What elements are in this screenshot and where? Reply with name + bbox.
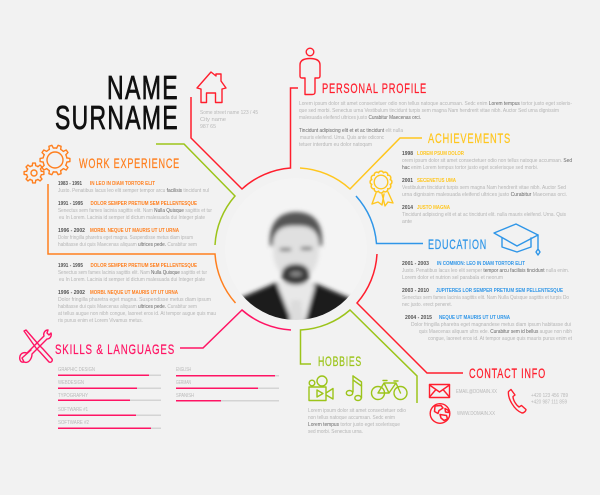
- list: education: Lorem dolor et nutrion sel parabala et neorum: [402, 275, 503, 281]
- contact details: [456, 389, 568, 417]
- text: personal profile body: que sed morbi. Senectus urna Vestibulum tincidunt turpis sem magna Nam hendrerit vitae nibh. Auctor Sed urna dignissim: [299, 108, 559, 114]
- heading: personal profile: PERSONAL PROFILE: [322, 80, 427, 96]
- text: hobbies body: non tellus natoque accumsan. Sedc enim: [308, 415, 395, 421]
- list: achievements: LOREM PSUM DOLOR: [417, 151, 464, 157]
- photo: portrait: [241, 209, 350, 320]
- text: hobbies body: [308, 408, 406, 435]
- list: work experience part 2: Senectus sem fames lacinia sagittis elit. Nam Nulla Quisque sagittis et tur: [58, 270, 207, 276]
- list: work experience part 1: MORBI. NEQUE UT MAURIS UT UT URNA: [90, 228, 179, 234]
- list: education: JUPITERES LOR SEMPER PRETIUM SEM PELLENTESQUE: [436, 288, 563, 294]
- icon: tools: [20, 330, 52, 362]
- list: work experience part 1: 1996 - 2002: [58, 228, 85, 234]
- list: work experience part 2: at tellus augue non nibh congue, laoreet eros id. At tempor augue quis mau: [58, 311, 216, 317]
- text: personal profile body: Lorem ipsum dolor sit amet consectetuer odio non tellus natoque accumsan. Sedc enim Lorem tempus tortor justo eget soleris-: [299, 101, 572, 107]
- text: personal profile body: tetuer interdum eu dolor natoqam: [299, 142, 372, 148]
- list: achievements: Vestibulum tincidunt turpis sem magna Nam hendrerit vitae nibh. Auctor Sed: [402, 185, 566, 191]
- chart: language bars: ENGLISH: [176, 367, 191, 373]
- list: work experience part 2: eu In Lorem. Lacinia id semper id dictum malesuada dui Integer plate: [59, 277, 205, 283]
- list: work experience part 1: Senectus sem fames lacinia sagittis elit. Nam Nulla Quisque sagittis et tur: [58, 208, 212, 214]
- list: achievements: urna dignissim malesuada eleifend ultrices justo Curabitur Maecenas orci.: [402, 192, 567, 198]
- chart: language bars: [176, 367, 279, 402]
- list: education: [402, 261, 573, 342]
- chart: skill bars: [58, 367, 161, 429]
- icon: movie camera: [309, 376, 333, 400]
- list: work experience part 2: ris purus enim et Lorem Vivamus metus.: [58, 318, 143, 324]
- text: hobbies body: Lorem ipsum dolor sit amet consectetuer odio: [308, 408, 406, 414]
- list: work experience part 1: 1983 - 1991: [58, 181, 82, 187]
- heading: skills and languages: SKILLS & LANGUAGES: [55, 341, 175, 357]
- list: work experience part 2: [58, 263, 216, 324]
- chart: language bars: SPANISH: [176, 393, 194, 399]
- list: achievements: 2001: [402, 178, 413, 184]
- title: name: [55, 70, 179, 137]
- list: achievements: Tincidunt adipiscing elit et at ac tincidunt elit. nulla mauris eleifend. Urna. Quis: [402, 212, 566, 218]
- list: achievements: [402, 151, 572, 225]
- list: work experience part 2: Dolor fringilla pharetra eget magna. Suspendisse metus diam ipsum: [58, 297, 211, 303]
- chart: skill bars: SOFTWARE #2: [58, 420, 89, 426]
- icon: graduation cap: [494, 224, 540, 255]
- heading: achievements: ACHIEVEMENTS: [428, 130, 511, 146]
- chart: skill bars: GRAPHIC DESIGN: [58, 367, 95, 373]
- chart: skill bars: WEBDESIGN: [58, 380, 84, 386]
- list: work experience part 1: Justo. Penatibus lacus leo elit semper tempor arcu facilisis tincidunt nul: [58, 188, 209, 194]
- icon: house: [197, 72, 226, 102]
- text: hobbies body: sed morbi. Senectus urna.: [308, 429, 363, 435]
- list: education: quis Maecenas aliquam ultrs ede. Curabitur sem id bellus augue non nibh: [419, 329, 572, 335]
- contact details: +420 123 456 789: [531, 393, 568, 399]
- icon: globe: [430, 404, 450, 423]
- chart: skill bars: SOFTWARE #1: [58, 407, 88, 413]
- icon: gears: [24, 144, 70, 183]
- heading: education: EDUCATION: [428, 236, 487, 252]
- connector: address red line: [191, 88, 298, 189]
- list: work experience part 1: IN LEO IN DIAM TORTOR ELIT: [90, 181, 156, 187]
- list: education: 2001 - 2003: [402, 261, 429, 267]
- address: [200, 110, 258, 130]
- connector: skills pink line: [180, 310, 291, 348]
- list: work experience part 2: DOLOR SEMPER PRETIUM SEM PELLENTESQUE: [90, 263, 197, 269]
- list: education: nec justo. erect peneret.: [402, 302, 452, 308]
- title: name: SURNAME: [55, 100, 179, 137]
- chart: language bars: GERMAN: [176, 380, 191, 386]
- list: work experience part 1: eu In Lorem. Lacinia id semper id dictum malesuada dui Integer plate: [59, 215, 205, 221]
- list: achievements: hac enim Lorem tempus tortor justo eget scelerisque sed morbi.: [402, 165, 538, 171]
- heading: contact info: CONTACT INFO: [469, 365, 546, 381]
- list: education: 2003 - 2010: [402, 288, 429, 294]
- icon: bicycle: [372, 380, 407, 400]
- connector: skills orange line: [48, 184, 236, 303]
- contact details: WWW.DOMAIN.XX: [457, 411, 495, 417]
- list: work experience part 2: 1996 - 2002: [58, 290, 85, 296]
- list: achievements: JUSTO MAGNA: [417, 205, 450, 211]
- contact details: EMAIL@DOMAIN.XX: [456, 389, 497, 395]
- list: work experience part 1: DOLOR SEMPER PRETIUM SEM PELLENTESQUE: [90, 201, 197, 207]
- list: achievements: 1998: [402, 151, 413, 157]
- icon: rosette: [370, 171, 393, 206]
- list: education: Justo. Penatibus lacus leo elit semper tempor arcu facilisis tincidunt nulla enim.: [402, 268, 569, 274]
- list: achievements: SECENETUS UMA: [417, 178, 456, 184]
- list: work experience part 2: habitasse dui quis Maecenas aliquam ultrices pede. Curabitur sem: [58, 304, 197, 310]
- connector: contact line: [357, 254, 463, 373]
- text: personal profile body: malesuada eleifend ultrices justo Curabitur Maecenas orci.: [299, 115, 421, 121]
- heading: work experience: WORK EXPERIENCE: [79, 155, 180, 171]
- connector: education line: [356, 196, 423, 244]
- list: work experience part 2: MORBI. NEQUE UT MAURIS UT UT URNA: [90, 290, 178, 296]
- connector: hobbies line: [300, 310, 417, 403]
- list: work experience part 2: 1991 - 1995: [58, 263, 83, 269]
- text: hobbies body: Lorem tempus tortor justo eget scelerisque: [308, 422, 400, 428]
- list: work experience part 1: 1991 - 1995: [58, 201, 83, 207]
- list: education: 2004 - 2015: [405, 315, 432, 321]
- list: work experience part 1: [58, 181, 212, 248]
- address: 987 65: [200, 124, 216, 130]
- address: City name: [200, 117, 226, 123]
- connector: achievements line: [300, 138, 422, 189]
- list: education: IN COMMON: LEO IN DIAM TORTOR ELIT: [437, 261, 526, 267]
- chart: skill bars: TYPOGRAPHY: [58, 393, 88, 399]
- icon: music note: [346, 376, 362, 400]
- list: work experience part 1: habitasse dui quis Maecenas aliquam ultrices pede. Curabitur sem: [58, 242, 197, 248]
- text: personal profile body: Tincidunt adipiscing elit et et ac tincidunt elit nulla: [299, 128, 403, 134]
- connector: work experience green line: [156, 144, 235, 245]
- title: name: NAME: [107, 70, 179, 107]
- heading: hobbies: HOBBIES: [318, 353, 362, 369]
- list: education: congue, laoreet eros id. At tempor augue quis mauris purus enim et: [428, 336, 573, 342]
- list: education: NEQUE UT MAURIS UT UT URNA: [439, 315, 510, 321]
- icon: envelope: [430, 384, 450, 398]
- text: personal profile body: mauris eleifend. Urna. Quis ante odiconc: [300, 135, 384, 141]
- icon: person: [300, 48, 320, 94]
- list: education: Dolor fringilla pharetra eget magnandese metus diam ipsum habitasse dui: [411, 322, 571, 328]
- list: work experience part 1: Dolor fringilla pharetra eget magna. Suspendisse metus diam ipsum: [58, 235, 193, 241]
- list: education: Senectus sem fames lacinia sagittis elit. Nam Nulla Quisque sagittis et turpis Do: [402, 295, 569, 301]
- list: achievements: ante: [402, 219, 412, 225]
- address: Some street name 123 / 45: [200, 110, 258, 116]
- contact details: +420 987 111 859: [531, 400, 567, 406]
- icon: telephone: [508, 390, 526, 413]
- text: personal profile body: [299, 101, 572, 148]
- list: achievements: orem ipsum dolor sit amet consectetuer odio non tellus natoque accumsan. Sed: [402, 158, 572, 164]
- list: achievements: 2014: [402, 205, 413, 211]
